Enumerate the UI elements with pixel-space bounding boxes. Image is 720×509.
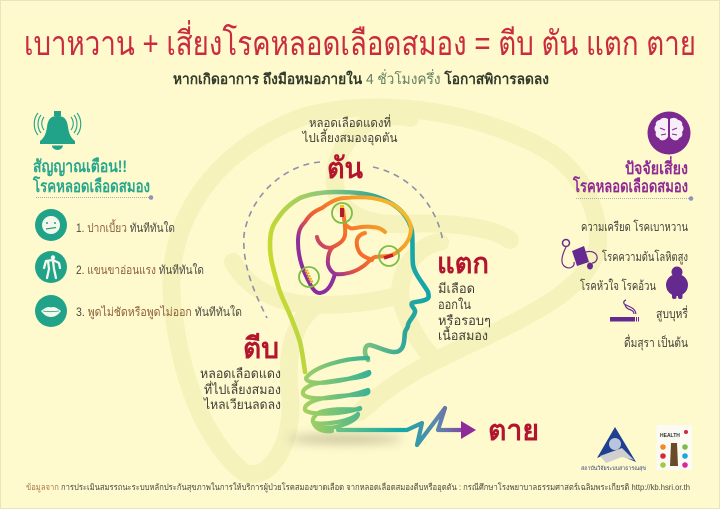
arrow to death [338, 408, 476, 445]
head bulb outline [270, 192, 429, 431]
bulb coil [303, 358, 369, 431]
icon: brain [648, 112, 690, 154]
label: rupture: ออกใน [438, 297, 471, 312]
dashed arcs [244, 162, 443, 318]
heading: risk factors [572, 156, 688, 196]
label: blocked: หลอดเลือดแดงที่ [309, 114, 391, 130]
label: narrowed [200, 333, 281, 412]
label: narrowed: ที่ไปเลี้ยงสมอง [204, 380, 281, 397]
heading: risk factors: โรคหลอดเลือดสมอง [572, 176, 688, 196]
heading: warning signs [32, 156, 150, 196]
risk list: สูบบุหรี่ [656, 305, 688, 322]
brain vessels [298, 197, 411, 293]
label: narrowed: หลอดเลือดแดง [200, 366, 281, 381]
label: rupture: มีเลือด [438, 281, 475, 296]
label: death: ตาย [488, 415, 539, 447]
label: narrowed: ไหลเวียนลดลง [203, 397, 281, 412]
item: slurred speech: 3. พูดไม่ชัดหรือพูดไม่ออก ทันทีทันใด [76, 305, 242, 320]
label: rupture [437, 248, 491, 343]
heading: risk factors: ปัจจัยเสี่ยง [625, 156, 688, 178]
risk list: โรคหัวใจ โรคอ้วน [580, 278, 656, 293]
logo: health infographic: HEALTH [660, 433, 680, 439]
logo: HSRI [581, 427, 646, 472]
item: facial droop [35, 209, 175, 241]
label: narrowed: ตีบ [243, 333, 279, 365]
risk list: ความเครียด โรคเบาหวาน [581, 219, 688, 234]
icon: cigarette [610, 300, 639, 322]
logo: health infographic [656, 425, 692, 470]
label: blocked: ไปเลี้ยงสมองอุดตัน [302, 128, 398, 146]
item: slurred speech [35, 295, 242, 327]
logo: HSRI: สถาบันวิจัยระบบสาธารณสุข [581, 465, 646, 472]
label: blocked: ตัน [327, 153, 363, 185]
item: facial droop: 1. ปากเบี้ยว ทันทีทันใด [76, 219, 175, 235]
risk list: ดื่มสุรา เป็นต้น [624, 334, 688, 351]
icon: alarm bell [34, 111, 81, 150]
label: rupture: หรือรอบๆ [438, 313, 491, 328]
label: rupture: แตก [437, 248, 489, 280]
risk list: โรคความดันโลหิตสูง [602, 249, 688, 265]
label: blocked [302, 114, 398, 185]
shadow under bulb [287, 434, 403, 444]
subtitle: หากเกิดอาการ ถึงมือหมอภายใน 4 ชั่วโมงครึ่ง โอกาสพิการลดลง [173, 69, 549, 88]
label: rupture: เนื้อสมอง [438, 326, 488, 343]
panel: risk factors [562, 112, 693, 351]
risk list [580, 219, 688, 351]
icon: blood pressure cuff [562, 240, 597, 270]
blockage markers [299, 203, 399, 287]
heading: warning signs: สัญญาณเตือน!! [33, 156, 127, 177]
panel: warning signs [32, 111, 242, 327]
heading: warning signs: โรคหลอดเลือดสมอง [32, 176, 150, 196]
item: limb weakness: 2. แขนขาอ่อนแรง ทันทีทันใด [76, 263, 204, 277]
item: limb weakness [35, 251, 204, 283]
icon: obese person [666, 266, 688, 299]
